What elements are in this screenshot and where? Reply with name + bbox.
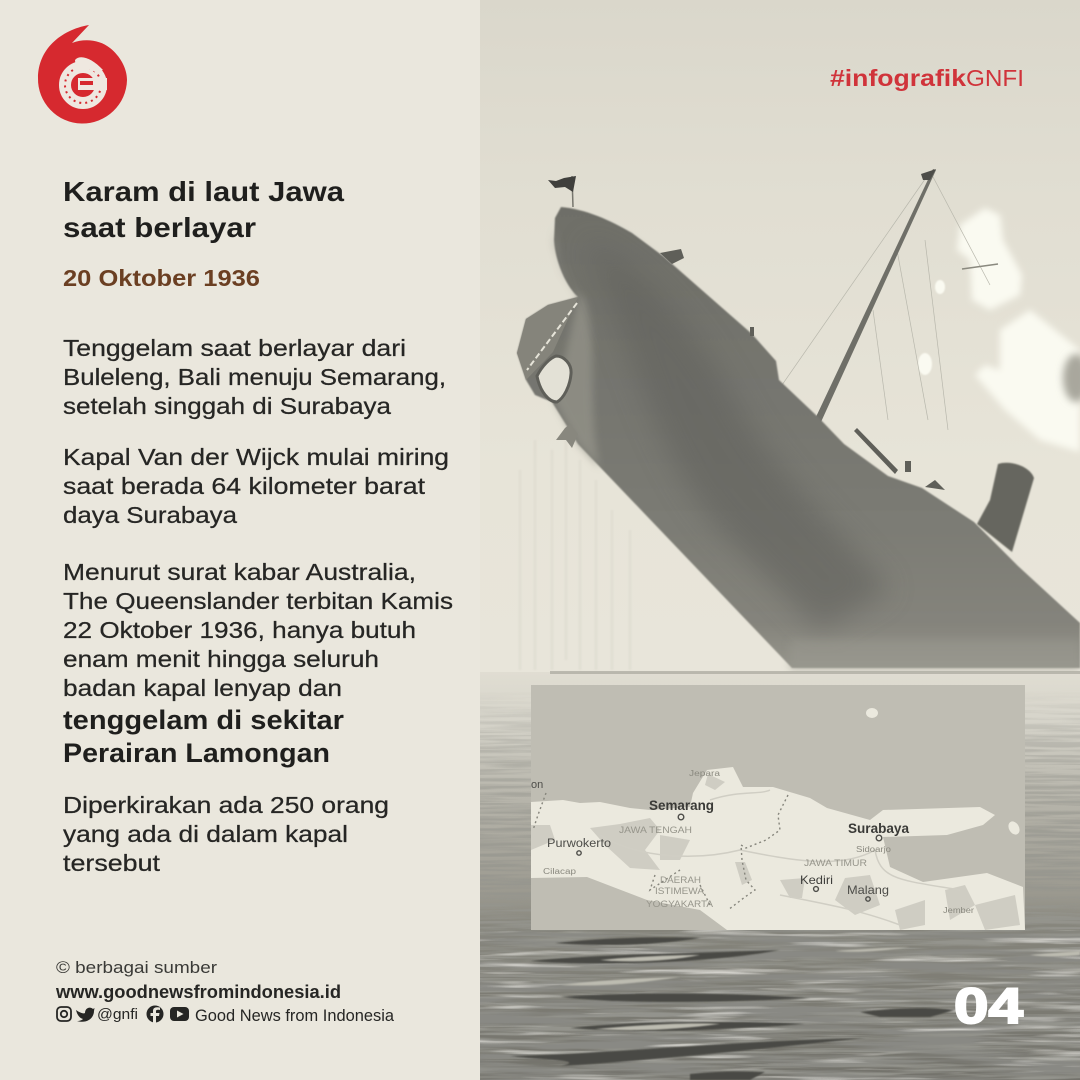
panel: left text background bbox=[0, 0, 480, 1080]
map labels: Malang bbox=[847, 883, 889, 897]
clouds bbox=[918, 208, 1080, 452]
horizon line bbox=[550, 671, 1080, 674]
date: 20 Oktober 1936 bbox=[63, 265, 260, 291]
map terrain patches bbox=[531, 774, 1020, 930]
source credit: © berbagai sumber bbox=[56, 958, 217, 977]
text block: passengers: Diperkirakan ada 250 orang bbox=[63, 792, 389, 818]
sea bbox=[480, 672, 1080, 1080]
text block: newspaper report: tenggelam di sekitar bbox=[63, 705, 345, 735]
mast flag bbox=[921, 169, 936, 180]
map sea bbox=[531, 685, 1025, 930]
map labels: Purwokerto bbox=[547, 838, 611, 850]
hull debris bbox=[556, 424, 578, 448]
logo: GNFI red six bbox=[38, 25, 127, 124]
map labels bbox=[531, 769, 974, 915]
text block: newspaper report: The Queenslander terbitan Kamis bbox=[63, 588, 453, 614]
map labels: Cilacap bbox=[543, 867, 577, 876]
map land bbox=[531, 767, 1025, 930]
map labels: Semarang bbox=[649, 798, 714, 813]
map islands bbox=[866, 708, 1022, 837]
text block: newspaper report: Perairan Lamongan bbox=[63, 738, 330, 768]
text block: newspaper report: Menurut surat kabar Australia, bbox=[63, 559, 416, 585]
anchor recess bbox=[517, 297, 578, 380]
map city markers bbox=[577, 814, 882, 901]
bow flag bbox=[548, 176, 576, 207]
ship funnel bbox=[977, 463, 1034, 552]
map: Java island bbox=[531, 685, 1025, 930]
map labels: DAERAH bbox=[660, 875, 701, 885]
text block: route: Tenggelam saat berlayar dari bbox=[63, 335, 406, 361]
sky bbox=[480, 0, 1080, 672]
text block: route bbox=[63, 335, 446, 419]
hull bow rim highlight bbox=[554, 214, 600, 468]
wave streaks coarse dark bbox=[480, 930, 1080, 1080]
text block: newspaper report: badan kapal lenyap dan bbox=[63, 675, 342, 701]
ship hull bbox=[517, 207, 1080, 668]
icon: facebook bbox=[146, 1006, 164, 1023]
icon: youtube bbox=[170, 1007, 189, 1021]
map labels: YOGYAKARTA bbox=[646, 899, 713, 909]
mast crossbar bbox=[962, 264, 998, 269]
icon: twitter bbox=[76, 1008, 94, 1022]
panel: ship photo bbox=[480, 0, 1080, 1080]
hashtag: #infografik bbox=[830, 65, 966, 91]
anchor hawse opening bbox=[537, 356, 571, 402]
social row bbox=[57, 1006, 395, 1025]
deck fittings bbox=[660, 249, 945, 490]
page name: Good News from Indonesia bbox=[195, 1006, 395, 1025]
map labels: Jember bbox=[943, 906, 974, 915]
map province borders bbox=[533, 793, 788, 910]
hull dark core bbox=[585, 240, 890, 630]
title: Karam di laut Jawa bbox=[63, 176, 344, 207]
hashtag: GNFI bbox=[966, 65, 1024, 91]
map labels: JAWA TIMUR bbox=[804, 858, 867, 869]
map labels: JAWA TENGAH bbox=[619, 825, 692, 836]
hull waterline haze bbox=[790, 640, 1080, 670]
logo emblem bbox=[65, 57, 107, 103]
text block: newspaper report: 22 Oktober 1936, hanya butuh bbox=[63, 617, 416, 643]
text block: passengers bbox=[63, 792, 389, 876]
ship rigging bbox=[782, 172, 990, 430]
map labels: Kediri bbox=[800, 873, 833, 887]
text block: tilting: daya Surabaya bbox=[63, 502, 238, 528]
title bbox=[63, 176, 344, 243]
anchor chain bbox=[527, 303, 577, 370]
wave streaks fine bbox=[480, 672, 1080, 1080]
text block: newspaper report: enam menit hingga seluruh bbox=[63, 646, 379, 672]
text block: route: setelah singgah di Surabaya bbox=[63, 393, 392, 419]
text block: tilting: saat berada 64 kilometer barat bbox=[63, 473, 426, 499]
website: www.goodnewsfromindonesia.id bbox=[55, 981, 341, 1002]
text block: tilting bbox=[63, 444, 449, 528]
text block: tilting: Kapal Van der Wijck mulai miring bbox=[63, 444, 449, 470]
map labels: ISTIMEWA bbox=[655, 886, 704, 896]
map labels: Sidoarjo bbox=[856, 845, 892, 854]
ship mast bbox=[815, 169, 936, 422]
grey cloud shade bbox=[1063, 354, 1080, 402]
map roads bbox=[646, 790, 952, 926]
text block: route: Buleleng, Bali menuju Semarang, bbox=[63, 364, 446, 390]
text block: passengers: tersebut bbox=[63, 850, 161, 876]
handle: @gnfi bbox=[97, 1006, 138, 1023]
map labels: Jepara bbox=[689, 769, 721, 778]
map labels: on bbox=[531, 779, 543, 791]
text block: newspaper report bbox=[63, 559, 453, 768]
page number: 04 bbox=[954, 978, 1023, 1034]
icon: instagram bbox=[57, 1007, 71, 1021]
wave streaks light bbox=[480, 930, 1080, 1080]
text block: passengers: yang ada di dalam kapal bbox=[63, 821, 348, 847]
dark swells bbox=[510, 937, 955, 1080]
title: saat berlayar bbox=[63, 212, 256, 243]
light swells bbox=[560, 947, 1080, 1030]
map labels: Surabaya bbox=[848, 821, 909, 836]
water streaks under the bow bbox=[520, 440, 630, 670]
